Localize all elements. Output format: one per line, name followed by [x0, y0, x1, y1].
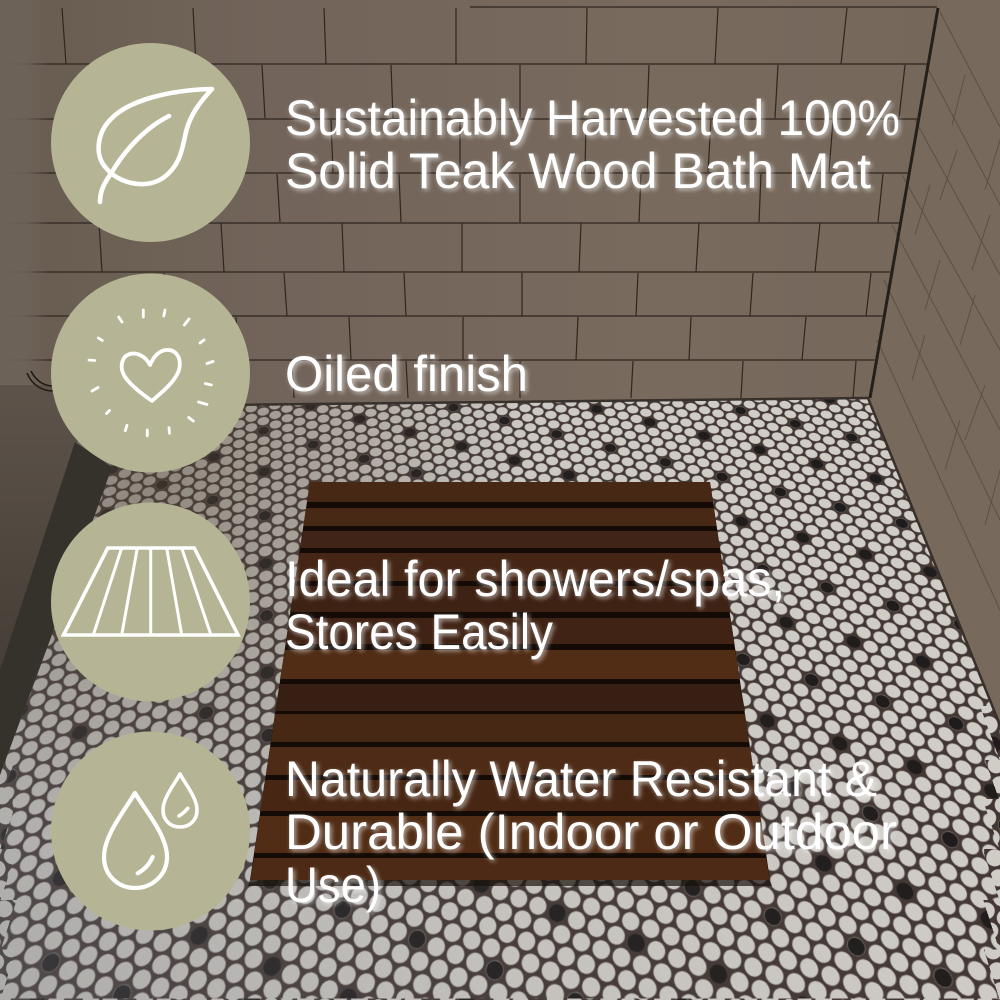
- feature text: ideal for showers: [285, 551, 785, 660]
- badge: leaf icon: [51, 43, 250, 242]
- translucent curtain: [0, 0, 100, 690]
- side wall tiles: [868, 0, 1000, 730]
- shower curb: [0, 442, 112, 775]
- feature text: water resistant and durable: Use): [285, 857, 381, 913]
- feature text: water resistant and durable: Naturally Water Resistant &: [285, 751, 877, 807]
- badge: water drops icon: [51, 732, 250, 930]
- back wall tiles: [0, 0, 940, 410]
- badge: heart with rays icon: [51, 274, 250, 472]
- feature text: sustainably harvested: [285, 90, 900, 199]
- teak mat: [248, 482, 772, 886]
- feature text: sustainably harvested: Solid Teak Wood Bath Mat: [285, 143, 871, 199]
- feature text: water resistant and durable: Durable (Indoor or Outdoor: [285, 804, 897, 860]
- penny tile floor drawn in perspective: [0, 399, 1000, 1000]
- feature text: ideal for showers: Stores Easily: [285, 604, 553, 660]
- badge: slatted mat icon: [51, 502, 250, 702]
- feature text: sustainably harvested: Sustainably Harvested 100%: [285, 90, 900, 146]
- floor light shading: [0, 398, 1000, 1000]
- feature text: water resistant and durable: [285, 751, 897, 913]
- feature text: oiled finish: Oiled finish: [285, 346, 528, 402]
- feature text: ideal for showers: Ideal for showers/spas,: [285, 551, 785, 607]
